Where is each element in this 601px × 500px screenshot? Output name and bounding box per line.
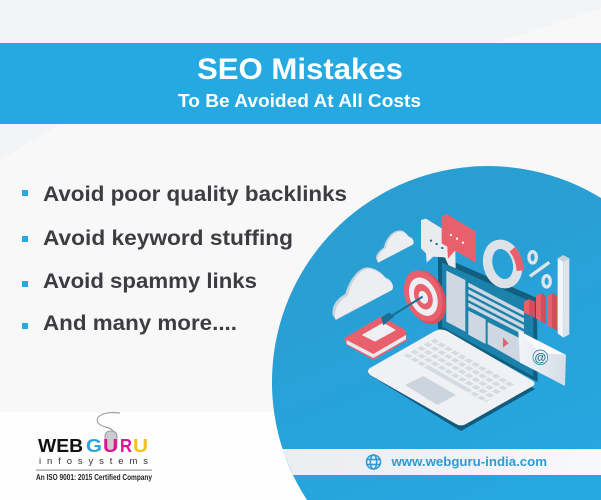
logo tagline: infosystems [39,456,148,467]
logo wordmark: U [133,436,148,456]
isometric laptop illustration [332,214,569,431]
icon: email envelope [518,331,566,386]
icon: white speech bubble [421,219,456,268]
touchpad [405,376,456,405]
laptop screen [438,255,538,382]
icon: small cloud [376,230,414,263]
logo wordmark: R [120,436,132,456]
icon: donut chart [483,241,522,287]
bullet 2: Avoid keyword stuffing [43,226,293,250]
icon: bar chart [524,255,569,338]
logo wordmark: G [86,436,102,456]
logo [36,413,152,482]
icon: mouse [105,431,117,451]
title banner [0,43,601,124]
icon: percent sign [529,252,550,287]
certification line: An ISO 9001: 2015 Certified Company [36,472,152,482]
icon: large cloud [332,267,393,320]
logo wordmark: WEB [38,436,83,456]
icon: at sign: @ [534,350,546,364]
icon: mouse cord [97,413,120,432]
icon: target with arrow [381,264,454,330]
logo wordmark: U [103,436,118,456]
title: SEO Mistakes [197,53,403,86]
laptop base [368,330,535,431]
subtitle: To Be Avoided At All Costs [178,90,421,111]
bullet list [22,182,347,335]
bullet 3: Avoid spammy links [43,269,257,293]
bullet 4: And many more.... [43,311,237,335]
website URL bar [282,449,601,475]
icon: red speech bubble [442,214,476,263]
icon: book [344,316,407,360]
logo wordmark [38,436,148,456]
keyboard keys [406,340,514,401]
background circle [272,166,601,500]
url text: www.webguru-india.com [390,454,547,469]
bullet 1: Avoid poor quality backlinks [43,182,347,206]
icon: globe [366,455,380,469]
